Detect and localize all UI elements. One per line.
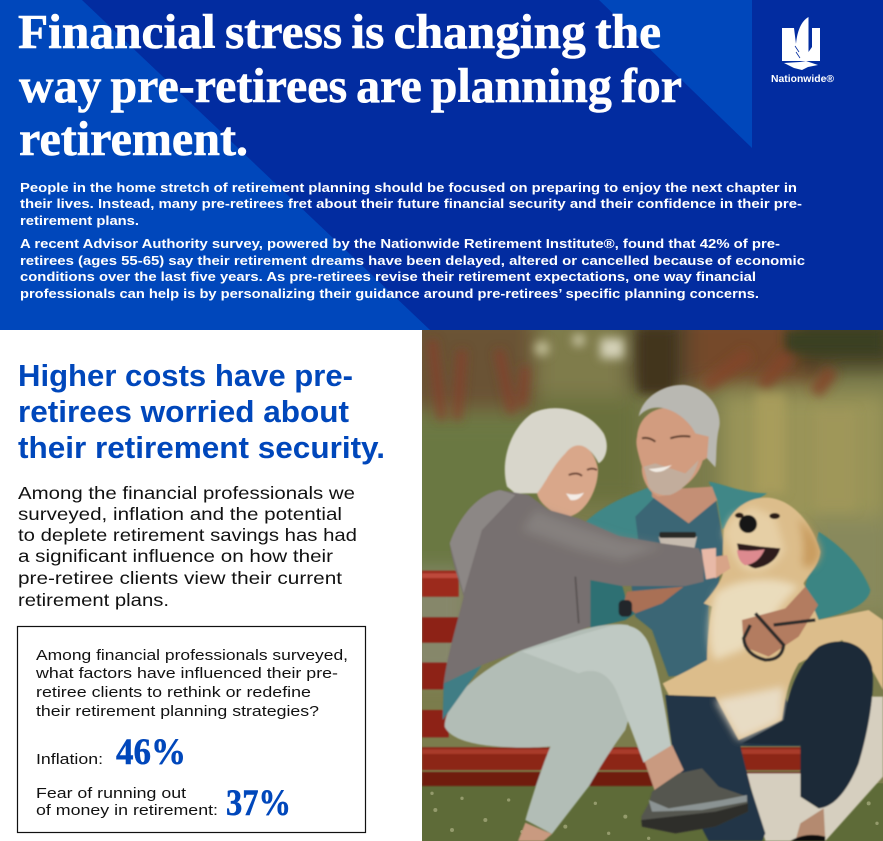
concrete bench leg <box>747 697 883 841</box>
text block: survey summary: Among the financial professionals we <box>18 483 355 503</box>
man: trousers <box>665 695 825 841</box>
statistic: fear of running out of money 37%: 37% <box>226 783 291 824</box>
photo: couple with golden retriever on a park bench <box>402 310 883 841</box>
title: retirement. <box>19 111 248 166</box>
man: shirt <box>629 493 724 677</box>
text block: intro paragraph one: their lives. Instead, many pre-retirees fret about their future financial security and their confidence in their pre- <box>20 196 802 211</box>
statistic: fear of running out of money 37%: Fear of running out <box>36 786 186 802</box>
text block: intro paragraph one: People in the home stretch of retirement planning should be focused on preparing to enjoy the next chapter in <box>20 180 797 195</box>
text block: survey question: what factors have influenced their pre- <box>35 666 338 682</box>
text block: intro paragraph two: professionals can help is by personalizing their guidance around pre-retirees’ specific planning concerns. <box>20 286 759 301</box>
man: hand with watch and coffee cup <box>619 532 697 617</box>
statistic: inflation 46% <box>36 732 186 773</box>
dog <box>663 498 883 740</box>
heading: higher costs: their retirement security. <box>18 431 385 465</box>
heading: higher costs <box>18 359 385 465</box>
icon: Nationwide logo <box>771 17 834 85</box>
bench <box>422 571 800 786</box>
text block: survey summary: retirement plans. <box>18 590 169 610</box>
man: neck and head <box>636 385 720 523</box>
man: teal jacket <box>584 482 870 628</box>
statistic: inflation 46%: Inflation: <box>36 752 103 768</box>
blurred autumn park background <box>402 310 883 841</box>
statistic: fear of running out of money 37% <box>36 783 291 824</box>
woman: feet and shoe <box>518 745 748 841</box>
icon: Nationwide logo: Nationwide® <box>771 73 834 85</box>
woman: grey jacket <box>443 490 704 720</box>
text block: intro paragraph one: retirement plans. <box>20 213 139 228</box>
text block: survey question: retiree clients to rethink or redefine <box>36 685 311 701</box>
heading: higher costs: retirees worried about <box>18 395 349 429</box>
heading: higher costs: Higher costs have pre- <box>18 359 353 393</box>
text block: survey summary: a significant influence on how their <box>18 546 333 566</box>
text block: intro paragraph one <box>20 180 802 228</box>
woman: hair and face <box>505 408 607 517</box>
man: hand holding leash and thigh <box>742 587 873 808</box>
text block: survey summary: pre-retiree clients view their current <box>18 568 342 588</box>
woman: hand and pink watch <box>701 548 730 579</box>
panel: blue header background <box>0 0 883 330</box>
statistic: fear of running out of money 37%: of money in retirement: <box>36 803 218 819</box>
panel: survey statistics box <box>18 626 366 832</box>
text block: intro paragraph two: A recent Advisor Authority survey, powered by the Nationwide Retirement Institute®, found that 42% of pre- <box>20 236 780 251</box>
text block: survey summary <box>18 483 357 610</box>
text block: survey summary: surveyed, inflation and the potential <box>18 504 342 524</box>
text block: survey question: Among financial professionals surveyed, <box>36 648 348 664</box>
text block: survey question <box>35 648 348 720</box>
title: Financial stress is changing the <box>18 4 661 59</box>
grass <box>422 783 883 841</box>
text block: intro paragraph two <box>20 236 805 301</box>
text block: intro paragraph two: conditions over the last five years. As pre-retirees revise their retirement expectations, one way financial <box>20 269 756 284</box>
title <box>18 4 682 166</box>
text block: survey question: their retirement planning strategies? <box>36 704 319 720</box>
text block: intro paragraph two: retirees (ages 55-65) say their retirement dreams have been delayed, altered or cancelled because of economic <box>20 253 805 268</box>
title: way pre-retirees are planning for <box>19 58 682 113</box>
statistic: inflation 46%: 46% <box>116 732 186 773</box>
text block: survey summary: to deplete retirement savings has had <box>18 525 357 545</box>
woman: leggings <box>445 624 671 834</box>
